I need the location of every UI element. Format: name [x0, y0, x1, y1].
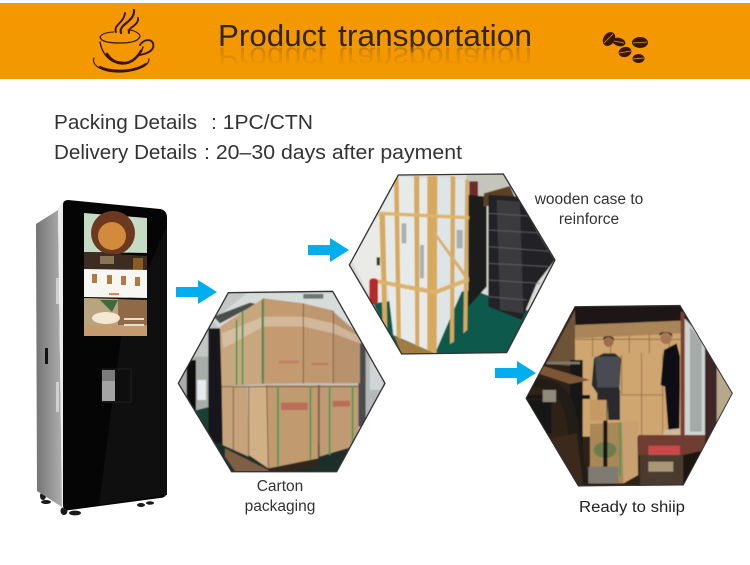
label: carton packaging: Carton — [257, 478, 303, 495]
packing details text: : 1PC/CTN — [211, 112, 313, 134]
title reflection: transportation — [338, 40, 532, 76]
packing details text: Packing Details — [54, 112, 197, 134]
title reflection — [210, 40, 540, 76]
dispenser — [102, 369, 131, 402]
delivery details text: Delivery Details — [54, 142, 197, 164]
machine feet — [40, 492, 154, 515]
label: ready to ship: Ready to shiip — [579, 499, 685, 516]
icon: coffee cup — [94, 10, 153, 72]
arrow to wooden case — [308, 238, 349, 262]
title reflection: Product — [218, 40, 326, 76]
photo: carton packaging hexagon — [178, 290, 386, 472]
arrow to ready to ship — [495, 361, 536, 385]
icon: coffee beans — [600, 30, 648, 63]
label: wooden case: reinforce — [559, 211, 619, 228]
label: wooden case: wooden case to — [534, 191, 643, 208]
label: carton packaging: packaging — [245, 498, 315, 515]
title — [218, 18, 532, 53]
truck edge and door — [681, 312, 685, 437]
machine front — [63, 200, 167, 510]
label: wooden case — [534, 191, 643, 228]
photo: ready to ship hexagon — [526, 304, 733, 486]
forklift — [527, 360, 607, 480]
touch screen — [84, 211, 147, 336]
title: transportation — [338, 18, 532, 53]
delivery details text — [54, 142, 462, 164]
photo: wooden case hexagon — [348, 173, 556, 355]
machine side panel — [36, 210, 62, 507]
coffee vending machine — [36, 200, 167, 515]
carton on forklift — [590, 421, 638, 483]
title: Product — [218, 18, 326, 53]
header banner — [0, 3, 750, 79]
delivery details text: : 20–30 days after payment — [204, 142, 462, 164]
worker left — [592, 353, 621, 420]
packing details text — [54, 112, 313, 134]
arrow to carton packaging — [176, 280, 217, 304]
worker right — [661, 343, 680, 430]
label: carton packaging — [245, 478, 315, 515]
